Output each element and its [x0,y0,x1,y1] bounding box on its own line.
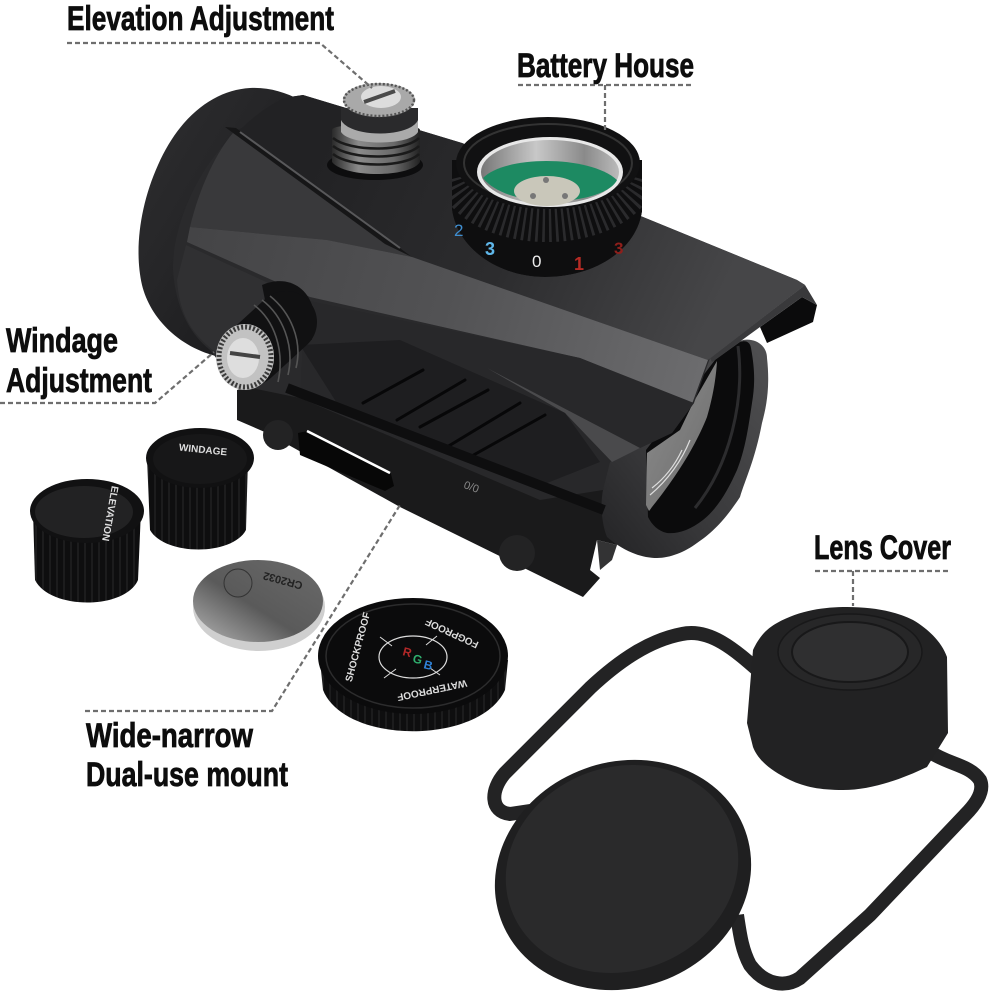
dial numbers: 3 [485,239,495,259]
elevation adjustment turret [327,83,423,180]
mount screws [263,420,293,450]
windage cap [146,428,254,550]
dial numbers: 1 [574,254,584,274]
rubber strap [494,633,981,984]
dial numbers: 2 [454,221,463,240]
top face [233,95,805,360]
lens cover [462,607,981,1000]
dial numbers: 3 [614,239,623,258]
leader lines [0,43,950,711]
hood lip [710,285,817,362]
battery cap: SHOCKPROOF [344,611,373,683]
label: Windage Adjustment: Adjustment [6,362,152,400]
label: Windage Adjustment [6,322,152,400]
red dot sight [139,83,817,597]
hood underside [760,297,817,343]
upper side panel [190,133,412,257]
elevation cap: ELEVATION [99,485,120,542]
label: Wide-narrow Dual-use mount: Wide-narrow [86,717,253,755]
label: Wide-narrow Dual-use mount [86,717,288,794]
windage cap: WINDAGE [178,443,228,459]
mount slot [298,431,394,491]
scope tube silhouette [173,95,805,490]
coin battery: CR2032 [262,569,304,591]
coin battery [193,560,325,651]
lens glass [646,361,717,511]
elevation cap [30,479,144,602]
rear cap [462,724,784,1000]
battery cap [318,598,508,731]
battery cap: WATERPROOF [396,677,468,702]
battery cap: G [411,651,424,667]
ridge groove [225,127,412,257]
dark seam above mount [287,388,604,510]
dial numbers: 0 [532,252,541,271]
label: Windage Adjustment: Windage [6,322,118,360]
front cap [747,607,948,790]
picatinny mount base [237,372,622,597]
rear objective bell [139,88,300,358]
label: Battery House: Battery House [517,47,694,85]
battery house dial [452,117,642,277]
dial numbers [454,221,623,274]
windage adjustment turret [216,281,312,390]
lower side panel with grooves [287,300,694,510]
front lens ring [602,340,768,558]
battery cap: B [422,657,435,673]
battery cap: R [401,644,414,660]
battery chamber [477,137,623,207]
label: Lens Cover: Lens Cover [814,529,951,567]
lower left panel [177,245,305,352]
faint marking: 0/0 [462,479,480,496]
mount foot [597,540,617,570]
label: Wide-narrow Dual-use mount: Dual-use mount [86,756,288,794]
label: Elevation Adjustment: Elevation Adjustment [67,0,334,38]
light side band [187,227,708,404]
battery cap: FOGPROOF [424,615,480,650]
